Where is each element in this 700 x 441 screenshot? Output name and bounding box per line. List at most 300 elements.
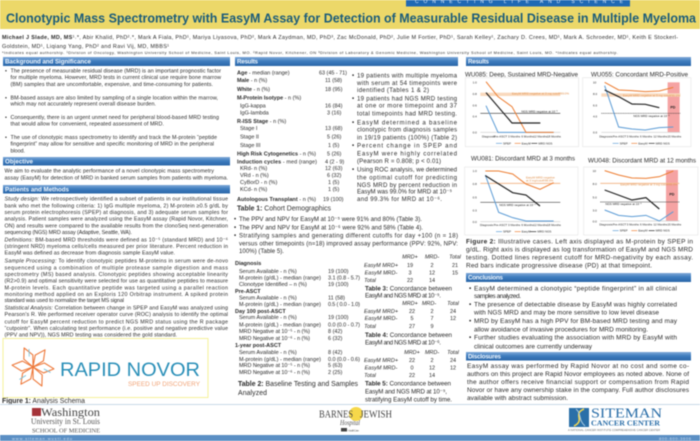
chart: WU055: 0.0 bbox=[593, 131, 597, 135]
text block: methods: monitoring method applied on an Exploris 120 Orbitrap instrument. A spiked protein bbox=[4, 292, 228, 298]
text block: methods: M-protein levels. Each quantitative peptide was targeted using a parallel reaction bbox=[4, 285, 228, 291]
table 2: baseline testing and samples: Day 100 post-ASCT bbox=[235, 309, 286, 315]
heading: disclosures: Disclosures bbox=[468, 353, 502, 360]
chart: WU085: Diagnosis bbox=[482, 134, 496, 138]
table 4: concordance at 10-6: 7 bbox=[430, 316, 434, 322]
chart: WU081: 12 Months bbox=[533, 223, 548, 227]
chart: WU048: EasyM MRD negative at 3 mg cutoff/99.0% bbox=[620, 183, 678, 187]
panel: background and significance bbox=[3, 57, 230, 154]
table 2: baseline testing and samples: MRD Negative at 10⁻⁵ - n (%) bbox=[239, 362, 310, 369]
table 2: baseline testing and samples: 0.0 (0.0 - 0.6) bbox=[328, 357, 360, 363]
authors and affiliations: *Indicates equal authorship. ¹Division of Oncology, Washington University School of Medicine, Saint Louis, MO. ²Rapid Novor, Kitchener, ON ³Division of Laboratory & Genomic Medicine, Washington University School of Medicine, Saint Louis, MO. *Indicates equal authorship. bbox=[2, 50, 618, 55]
logo: Siteman Cancer Center: CANCER CENTER bbox=[591, 418, 661, 428]
chart titles second row bbox=[471, 156, 697, 164]
text block: results bullets: clonotypic from diagnosis samples bbox=[357, 127, 457, 134]
panel: disclosures bbox=[466, 352, 691, 402]
chart: WU081: SPEP bbox=[503, 230, 511, 234]
text block: conclusions bullets: The presence of detectable disease by EasyM was highly correlated bbox=[474, 301, 677, 308]
table 2: baseline testing and samples: 3.1 (0.8 - 5.7) bbox=[328, 276, 360, 282]
text block: results bullets: 19 patients with multiple myeloma bbox=[357, 73, 458, 80]
chart: WU048: 5.0 bbox=[593, 195, 597, 199]
table 2: baseline testing and samples: Serum Available - n (%) bbox=[239, 269, 297, 275]
table 4: concordance at 10-6 bbox=[364, 301, 460, 330]
chart: WU055: SPEP bbox=[620, 141, 628, 145]
table 2 caption: Table 2: Baseline Testing and Samples bbox=[238, 381, 359, 388]
text block: methods: Statistical Analysis: Correlation between change in SPEP and EasyM was analyzed using bbox=[4, 305, 228, 311]
table 3: concordance at 10-5: 21 bbox=[452, 263, 458, 269]
text block: methods: cutoff for EasyM percent reduction to predict NGS MRD status using the R package bbox=[4, 319, 228, 325]
table 1: cohort demographics: IgG-kappa bbox=[240, 104, 267, 110]
figure 2 caption: Figure 2: Illustrative cases. Left axis displayed as M-protein by SPEP in bbox=[466, 239, 693, 246]
table 5: concordance stratified by time: Total bbox=[447, 350, 460, 356]
logo: Washington University School of Medicine: SCHOOL OF MEDICINE bbox=[32, 428, 101, 434]
table 2: baseline testing and samples: MRD Negative at 10⁻⁶ - n (%) bbox=[239, 335, 310, 342]
logo: Barnes-Jewish Hospital: Hospital bbox=[339, 419, 360, 427]
text block: results bullets: with serum at 54 timepoints were bbox=[356, 80, 458, 87]
table 3: concordance at 10-5: MRD+ bbox=[402, 254, 419, 260]
chart: WU085: 18 Months bbox=[547, 134, 561, 138]
table 3: concordance at 10-5: 22 bbox=[407, 278, 413, 284]
chart: WU085: EasyM MRD negative at 3 mg cutoff/99.0% bbox=[512, 91, 569, 95]
figure 2 caption bbox=[466, 239, 693, 270]
table 1: cohort demographics: 13 (68) bbox=[325, 126, 343, 132]
text block: results bullets: at one or more timepoint and 37 bbox=[357, 103, 458, 110]
text block: conclusions bullets: allow avoidance of invasive procedures for MRD monitoring. bbox=[474, 326, 648, 333]
chart: WU048: 15 Months bbox=[667, 222, 682, 226]
text block: methods bbox=[4, 197, 228, 339]
chart: WU081: 1.0 bbox=[473, 169, 477, 173]
text block: results bullets: total timepoints had MRD testing. bbox=[357, 111, 457, 118]
table 1: cohort demographics: 5 (26) bbox=[327, 152, 342, 158]
text block: results bullets: in 19/19 patients (100%) (Table 2) bbox=[357, 134, 457, 141]
chart: WU055: 6 Months bbox=[640, 134, 653, 138]
chart: WU081: 0.0 bbox=[473, 220, 477, 224]
chart: WU085: 0.8 bbox=[473, 92, 477, 96]
chart: WU055: MRD NGS bbox=[656, 141, 670, 145]
text block: methods: sequenced using a combination of multiple protease sample digestion and mass bbox=[4, 265, 228, 271]
text block: results bullets: • bbox=[352, 73, 354, 80]
text block: methods: sequencing (NGS) MRD assay (Adaptive, Seattle, WA). bbox=[4, 230, 132, 236]
chart: WU081 bbox=[465, 167, 578, 235]
table 2: baseline testing and samples: 19 (100) bbox=[328, 282, 349, 288]
table 1: cohort demographics: 5 (26) bbox=[327, 134, 342, 140]
text block: results bullets: • bbox=[352, 119, 354, 126]
table 1: cohort demographics: 4 (2 - 9) bbox=[325, 160, 344, 166]
table 3: concordance at 10-5: 3 bbox=[408, 270, 412, 276]
text block: methods: “cutpointr”. When calculating test performance (i.e. positive and negative predictive value bbox=[4, 326, 228, 332]
text block: results bullets bbox=[352, 73, 458, 203]
table 5: concordance stratified by time: MRD- bbox=[425, 350, 439, 356]
chart titles top row bbox=[465, 72, 688, 78]
text block: methods: ON) and results were compared to the available results from the clonoSeq next-generation bbox=[4, 223, 228, 229]
icon: Rapid Novor star bbox=[12, 346, 54, 388]
chart: WU048: 3 Months bbox=[627, 222, 639, 226]
chart: WU048: 3.0 bbox=[593, 209, 597, 213]
table 1: cohort demographics: M-Protein Isotype - n (%) bbox=[237, 96, 301, 102]
text block: PPV and NPV bullets: • bbox=[234, 233, 236, 240]
table 2: baseline testing and samples: Clonotype Identified – n (%) bbox=[239, 282, 307, 288]
table 2: baseline testing and samples: 2 (25) bbox=[328, 370, 343, 376]
chart: WU055: 10 bbox=[593, 81, 597, 85]
figure 1: Rapid Novor logo: RAPID NOVOR bbox=[60, 360, 200, 381]
table 3 caption bbox=[365, 285, 453, 300]
figure 2 caption: g/dL. Right axis is displayed as log transformation of EasyM and NGS MRD bbox=[466, 246, 693, 253]
chart titles top row: WU085: Deep, Sustained MRD-Negative bbox=[465, 72, 578, 78]
chart: WU081: at 3 mg/cutoff/99.0% bbox=[526, 179, 554, 183]
text block: conclusions bullets bbox=[469, 285, 678, 351]
text block: methods: Definitions: BM-based MRD thresholds were defined as 10⁻⁵ (standard MRD) and 10⁻⁶ bbox=[4, 237, 228, 243]
table 2: baseline testing and samples: 5 (63) bbox=[328, 363, 343, 369]
chart: WU048 bbox=[584, 167, 698, 235]
text block: background bullets: • bbox=[5, 68, 7, 74]
chart: WU055: 4.0 bbox=[593, 115, 597, 119]
text block: background bullets: which may not accurately represent overall disease burden. bbox=[10, 102, 156, 108]
panel: patients and methods bbox=[3, 185, 230, 339]
table 1: cohort demographics: KRd- n (%) bbox=[240, 166, 267, 172]
chart: WU085: 0.0 bbox=[473, 131, 477, 135]
logo: Washington University School of Medicine bbox=[31, 405, 101, 434]
table 2: baseline testing and samples: Serum Available - n (%) bbox=[239, 350, 297, 356]
table 5: concordance stratified by time: 0 bbox=[410, 366, 414, 372]
text block: PPV and NPV bullets: 100%) (Table 5). bbox=[239, 248, 284, 255]
table 1: cohort demographics: Autologous Transplant - n (%) bbox=[237, 197, 316, 203]
chart: WU085: 0.4 bbox=[473, 115, 477, 119]
table 4: concordance at 10-6: 5 bbox=[410, 316, 414, 322]
logo: Barnes-Jewish Hospital: BARNES bbox=[319, 410, 353, 420]
table 3: concordance at 10-5: 19 bbox=[407, 263, 413, 269]
table 3: concordance at 10-5: 15 bbox=[452, 270, 458, 276]
authors and affiliations: Michael J Slade, MD, MS¹˒*, Abir Khalid, PhD²˒*, Mark A Fiala, PhD¹, Mariya Liyasova, PhD², Mark A Zaydman, MD, PhD³, Zac McDonald, PhD², Julie M Fortier, PhD¹, Sarah Kelley¹, Zachary D. Crees, MD¹, Mark A. Schroeder, MD¹, Keith E Stockerl- bbox=[2, 35, 678, 41]
panel: conclusions bbox=[466, 273, 691, 351]
table 1: cohort demographics: 11 (58) bbox=[325, 78, 342, 84]
table 3: concordance at 10-5: MRD- bbox=[425, 254, 439, 260]
text block: conclusions bullets: MRD by EasyM has a high PPV for BM-based MRD testing and may bbox=[474, 318, 678, 325]
chart: WU048: Diagnosis bbox=[599, 222, 613, 226]
table 2: baseline testing and samples: Pre-ASCT bbox=[235, 289, 261, 295]
text block: disclosures: available with abstract submission. bbox=[467, 395, 568, 402]
table 4: concordance at 10-6: Total bbox=[447, 301, 460, 307]
table 5: concordance stratified by time: 24 bbox=[450, 358, 456, 364]
text block: background bullets: BM-based assays are also limited by sampling of a single location within the marrow, bbox=[10, 95, 218, 101]
text block: conclusions bullets: • bbox=[469, 318, 472, 325]
text block: results bullets: Percent change in SPEP and bbox=[357, 143, 457, 150]
text block: methods: spectrometry (MS) based analysis. Clonotypic peptides showing acceptable linearity bbox=[4, 272, 228, 278]
table 1: cohort demographics: 1 (5) bbox=[328, 187, 339, 193]
chart: WU085: 6 Months bbox=[521, 134, 534, 138]
text block: PPV and NPV bullets: Stratifying samples and generating different cutoffs for day +100 (n = 18) bbox=[239, 233, 458, 240]
text block: background bullets: • bbox=[5, 115, 7, 121]
chart: WU081: Pre-ASCT bbox=[494, 223, 507, 227]
heading: patients and methods: Patients and Methods bbox=[5, 186, 70, 193]
table 2: baseline testing and samples: 6 (32) bbox=[328, 336, 343, 342]
text block: conclusions bullets: Further studies evaluating the association with MRD by EasyM with bbox=[474, 335, 677, 342]
chart: WU055: Diagnosis bbox=[599, 134, 613, 138]
table 1: cohort demographics: 63 (45 - 71) bbox=[319, 70, 347, 76]
table 4: concordance at 10-6: MRD- bbox=[422, 301, 436, 307]
text block: PPV and NPV bullets: • bbox=[234, 216, 236, 223]
text block: results bullets: identified (Tables 1 & 2) bbox=[357, 87, 429, 94]
table 2: baseline testing and samples: 11 (58) bbox=[328, 296, 345, 302]
chart: WU081: 0.8 bbox=[473, 182, 477, 186]
panel: results column bbox=[234, 57, 462, 403]
table 1: cohort demographics: Induction cycles - med (range) bbox=[237, 160, 317, 166]
chart titles second row: WU048: Discordant MRD at 12 months bbox=[588, 158, 697, 164]
text block: background bullets: (BM) samples that are uncomfortable, expensive, and time-consuming for patients. bbox=[10, 82, 213, 88]
table 4: concordance at 10-6: 22 bbox=[409, 309, 415, 315]
heading: background and significance bbox=[3, 57, 230, 66]
heading: results bbox=[466, 57, 691, 66]
chart: WU055: 15 Months bbox=[667, 134, 682, 138]
text block: conclusions bullets: • bbox=[469, 285, 472, 292]
chart: WU055: 6.0 bbox=[593, 103, 597, 107]
logo: Siteman Cancer Center: A NATIONAL CANCER INSTITUTE COMPREHENSIVE CANCER CENTER bbox=[568, 428, 660, 432]
chart titles second row: WU081: Discordant MRD at 3 months bbox=[471, 156, 576, 162]
figure 1 caption: Figure 1: Analysis Schema bbox=[2, 398, 85, 405]
table 2: baseline testing and samples: 8 (42) bbox=[328, 350, 343, 356]
chart: WU048: SPEP bbox=[620, 229, 628, 233]
text block: disclosures: Novor or have any ownership stake in the company. Full author disclosures bbox=[467, 387, 690, 394]
figure 1: Rapid Novor logo bbox=[3, 338, 208, 398]
text block: objective: assay (EasyM) for detection of MRD in banked serum samples from patients with myeloma. bbox=[4, 175, 228, 181]
chart: WU081: 18 Months bbox=[547, 223, 561, 227]
table 1: cohort demographics: Stage II bbox=[240, 134, 259, 140]
text block: results bullets: • bbox=[352, 166, 354, 173]
text block: PPV and NPV bullets: The PPV and NPV for EasyM at 10⁻⁵ were 91% and 80% (Table 3). bbox=[239, 216, 422, 223]
text block: background bullets: Consequently, there is an urgent unmet need for peripheral blood-based MRD testing bbox=[10, 115, 219, 121]
table 1: cohort demographics: Male - n (%) bbox=[237, 78, 267, 84]
title banner: Clonotypic Mass Spectrometry with EasyM Assay for Detection of Measurable Residual Disease in Multiple Myeloma bbox=[6, 10, 697, 26]
logo: Barnes-Jewish Hospital: JEWISH bbox=[360, 410, 392, 420]
table 2: baseline testing and samples: M-protein (g/dL) - median (range) bbox=[239, 302, 321, 308]
chart: WU048: MRD NGS bbox=[656, 229, 670, 233]
chart: WU081: NGS MRD negative at 10⁻⁵ bbox=[499, 203, 537, 207]
figure 2 caption: testing. Dotted lines represent cutoff for MRD-negativity by each assay. bbox=[466, 254, 693, 261]
table 1: cohort demographics: R-ISS Stage - n (%) bbox=[237, 119, 286, 125]
authors and affiliations: Goldstein, MD¹, Liqiang Yang, PhD² and Ravi Vij, MD, MBBS¹ bbox=[2, 44, 169, 50]
text block: background bullets bbox=[5, 68, 221, 154]
chart: WU085: EasyM bbox=[522, 141, 531, 145]
table 3: concordance at 10-5: Total bbox=[364, 278, 377, 284]
text block: results bullets: EasyM was 99.0% for MRD at 10⁻⁵ bbox=[357, 189, 452, 196]
table 2: baseline testing and samples: M-protein (g/dL) - median (range) bbox=[239, 357, 321, 363]
chart: WU085: NGS MRD negative at 10⁻⁵ bbox=[521, 109, 559, 113]
table 1: cohort demographics: White - n (%) bbox=[237, 87, 270, 93]
table 4 caption: Table 4: Concordance between bbox=[365, 332, 453, 339]
heading: results: Results bbox=[468, 59, 490, 66]
table 4: concordance at 10-6: 27 bbox=[409, 324, 415, 330]
table 1: cohort demographics: 18 (95) bbox=[325, 87, 343, 93]
table 2 caption: Analyzed bbox=[238, 390, 267, 397]
text block: PPV and NPV bullets bbox=[234, 216, 458, 255]
table 2: baseline testing and samples: M-protein (g/dL) - median (range) bbox=[239, 322, 321, 328]
table 2 caption bbox=[238, 381, 359, 397]
chart: WU085: Pre-ASCT bbox=[494, 134, 507, 138]
chart: WU055: PD bbox=[670, 105, 676, 109]
chart: WU085: MRD NGS bbox=[538, 141, 552, 145]
chart: WU085: 3 Months bbox=[508, 134, 521, 138]
text block: results bullets: EasyM were highly correlated bbox=[357, 150, 457, 157]
table 5: concordance stratified by time: MRD+ bbox=[404, 350, 421, 356]
chart: WU048: 12 Months bbox=[653, 222, 668, 226]
heading: results bbox=[235, 57, 458, 66]
table 3: concordance at 10-5: 14 bbox=[429, 278, 435, 284]
chart: WU081: 0.5 bbox=[473, 195, 477, 199]
table 5 caption: Table 5: Concordance between bbox=[365, 381, 452, 388]
text block: results bullets: 19 patients had NGS MRD testing bbox=[357, 95, 457, 102]
text block: background bullets: that would allow for convenient, repeated assessment of MRD. bbox=[10, 122, 164, 128]
figure 1: Rapid Novor logo: SPEED UP DISCOVERY bbox=[128, 382, 200, 388]
panel: objective bbox=[3, 157, 230, 181]
text block: results bullets: NGS MRD by percent reduction in bbox=[357, 182, 457, 189]
heading: objective: Objective bbox=[5, 158, 34, 165]
text block: disclosures: the author offers receive financial support or compensation from Rapid bbox=[467, 379, 689, 386]
footer bar bbox=[0, 435, 700, 441]
figure 2 caption: Red bars indicate progressive disease (PD) at that timepoint. bbox=[466, 263, 652, 270]
footer bar: 800-600-3606 bbox=[659, 436, 692, 441]
chart: WU081: Diagnosis bbox=[480, 223, 494, 227]
table 3 caption: EasyM and NGS MRD at 10⁻⁵. bbox=[365, 293, 441, 300]
text block: conclusions bullets: • bbox=[469, 335, 472, 342]
table 1: cohort demographics: 12 (63) bbox=[325, 166, 343, 172]
table 1 caption: Table 1: Cohort Demographics bbox=[237, 206, 332, 212]
chart: WU048: 10 bbox=[593, 169, 596, 173]
table 5: concordance stratified by time: EasyM MRD- bbox=[365, 366, 398, 372]
table 1: cohort demographics: Stage I bbox=[240, 126, 258, 132]
table 2: baseline testing and samples: 0.5 ( 0.0 - 1.0) bbox=[328, 302, 360, 308]
table 2: baseline testing and samples: Serum Available - n (%) bbox=[239, 315, 297, 321]
table 4: concordance at 10-6: Total bbox=[364, 324, 377, 330]
table 4 caption bbox=[365, 332, 453, 347]
table 1: cohort demographics: 19 (100) bbox=[323, 197, 344, 203]
table 3: concordance at 10-5: 12 bbox=[429, 270, 435, 276]
footer bar: www.siteman.wustl.edu bbox=[12, 436, 72, 441]
table 5 caption: EasyM and NGS MRD at 10⁻⁵, bbox=[365, 389, 447, 396]
text block: methods: bank who met the following criteria: 1) IgG multiple myeloma, 2) M-protein ≥0.5 g/dL by bbox=[4, 203, 228, 209]
table 5: concordance stratified by time: EasyM MRD+ bbox=[364, 358, 399, 364]
text block: methods: (PPV and NPV)), NGS MRD testing was considered the gold standard. bbox=[4, 333, 177, 339]
chart: WU085: 12 Months bbox=[533, 134, 548, 138]
table 5: concordance stratified by time: 12 bbox=[450, 366, 456, 372]
table 1: cohort demographics: Stage III bbox=[240, 143, 261, 149]
text block: methods: analysis. Patient samples were analyzed using the EasyM assay (Rapid Novor, Kitchner, bbox=[4, 217, 228, 223]
heading: conclusions: Conclusions bbox=[468, 275, 504, 282]
text block: conclusions bullets: EasyM determined a clonotypic “peptide fingerprint” in all clinical bbox=[474, 285, 678, 292]
table 4: concordance at 10-6: 12 bbox=[450, 316, 456, 322]
table 2: baseline testing and samples: 1-year post-ASCT bbox=[235, 343, 282, 349]
chart: WU055: NGS MRD negative at 10⁻⁵ bbox=[633, 114, 671, 118]
heading: patients and methods bbox=[3, 185, 230, 194]
text block: background bullets: The presence of measurable residual disease (MRD) is an important prognostic factor bbox=[10, 68, 221, 74]
table 3: concordance at 10-5 bbox=[364, 254, 462, 284]
table 4: concordance at 10-6: 9 bbox=[430, 324, 434, 330]
table 2: baseline testing and samples: 0.0 (0.0 - 0.7) bbox=[328, 322, 360, 328]
heading: disclosures bbox=[466, 352, 691, 360]
table 1: cohort demographics: KCd- n (%) bbox=[240, 187, 267, 193]
table 5: concordance stratified by time: 14 bbox=[429, 373, 435, 379]
table 5: concordance stratified by time: 12 bbox=[429, 366, 435, 372]
table 4: concordance at 10-6: EasyM MRD- bbox=[365, 316, 398, 322]
text block: disclosures: authors on this project are Rapid Novor employees as noted above. None of bbox=[467, 371, 689, 378]
table 4: concordance at 10-6: 24 bbox=[450, 309, 456, 315]
table 3: concordance at 10-5: EasyM MRD+ bbox=[364, 263, 399, 269]
text block: results bullets: • bbox=[352, 143, 354, 150]
table 1: cohort demographics: 16 (84) bbox=[325, 104, 343, 110]
table 2: baseline testing and samples: M-protein (g/dL) - median (range) bbox=[239, 276, 321, 282]
text block: results bullets: and 99.3% for MRD at 10⁻⁶. bbox=[357, 196, 442, 203]
text block: conclusions bullets: clinical outcomes are currently underway bbox=[474, 344, 593, 351]
chart: WU055: 3 Months bbox=[627, 134, 639, 138]
text block: conclusions bullets: samples analyzed. bbox=[474, 293, 521, 300]
chart: WU081: EasyM bbox=[522, 230, 531, 234]
chart: WU048: EasyM bbox=[638, 229, 648, 233]
table 2: baseline testing and samples: 19 (100) bbox=[328, 315, 349, 321]
table 2: baseline testing and samples: Serum Available - n (%) bbox=[239, 296, 297, 302]
table 2: baseline testing and samples: 8 (42) bbox=[328, 329, 343, 335]
text block: methods: EasyM was defined as decrease from diagnosis sample EasyM value. bbox=[4, 251, 175, 257]
title banner bbox=[0, 0, 700, 29]
text block: background bullets: for multiple myeloma. However, MRD tests in current clinical use require bone marrow bbox=[10, 75, 221, 81]
text block: disclosures: EasyM assay was performed by Rapid Novor at no cost and some co- bbox=[467, 363, 689, 370]
text block: background bullets: The use of clonotypic mass spectrometry to identify and track the M-protein “peptide bbox=[10, 135, 217, 141]
table 1: cohort demographics: CyBorD - n (%) bbox=[240, 180, 277, 186]
text block: results bullets: the optimal cutoff for predicting bbox=[357, 174, 457, 181]
text block: results bullets: • bbox=[352, 95, 354, 102]
table 1: cohort demographics: 1 (5) bbox=[328, 143, 339, 149]
text block: methods: serum protein electrophoresis (SPEP) at diagnosis, and 3) adequate serum samples for bbox=[4, 210, 228, 216]
chart: WU055: Pre-ASCT bbox=[613, 134, 626, 138]
table 3: concordance at 10-5: 2 bbox=[430, 263, 434, 269]
table 2: baseline testing and samples: MRD Negative at 10⁻⁵ - n (%) bbox=[239, 328, 310, 335]
text block: conclusions bullets: with NGS MRD and may be more sensitive to low level disease bbox=[473, 310, 659, 317]
heading: conclusions bbox=[466, 273, 691, 282]
text block: conclusions bullets: • bbox=[469, 301, 472, 308]
text block: background bullets: blood. bbox=[10, 148, 25, 154]
text block: PPV and NPV bullets: versus other timepoints (n=18) improved assay performance (PPV: 92%, NPV: bbox=[239, 240, 458, 247]
table 2: baseline testing and samples: MRD Negative at 10⁻⁶ - n (%) bbox=[239, 369, 310, 376]
table 5: concordance stratified by time bbox=[364, 350, 460, 379]
chart: WU081: EasyM MRD negative bbox=[526, 175, 555, 179]
chart: WU081: 3 Months bbox=[508, 223, 521, 227]
text block: methods: (R2>0.9) and optimal sensitivity were selected for use as quantitative peptides to measure bbox=[4, 279, 228, 285]
table 3: concordance at 10-5: Total bbox=[449, 254, 462, 260]
table 1: cohort demographics: 1 (5) bbox=[328, 180, 339, 186]
chart: WU055 bbox=[583, 78, 691, 147]
table 1: cohort demographics: IgG-lambda bbox=[240, 110, 270, 116]
chart: WU048: PD bbox=[669, 193, 675, 197]
text block: background bullets: • bbox=[5, 135, 7, 141]
text block: PPV and NPV bullets: The PPV and NPV for EasyM at 10⁻⁶ were 92% and 58% (Table 4). bbox=[239, 225, 423, 232]
text block: results bullets: EasyM determined a baseline bbox=[357, 119, 458, 126]
chart: WU085: 1.0 bbox=[473, 81, 477, 85]
chart titles top row: WU055: Concordant MRD-Positive bbox=[591, 72, 688, 78]
logo: Siteman Cancer Center: SITEMAN bbox=[591, 406, 662, 422]
chart: WU048: 0.0 bbox=[593, 219, 597, 223]
text block: background bullets: • bbox=[5, 95, 7, 101]
table 2: baseline testing and samples bbox=[235, 261, 360, 376]
footer divider bbox=[0, 404, 700, 406]
text block: results bullets: (Pearson R = 0.808; p < 0.01) bbox=[357, 158, 441, 165]
chart: WU081: MRD NGS bbox=[537, 230, 551, 234]
chart: WU085: 0.6 bbox=[473, 103, 477, 107]
text block: methods: (stringent NRD) myeloma cells/cells measured per prior literature. Percent reduction in bbox=[4, 244, 228, 250]
logo: Washington University School of Medicine: Washington bbox=[41, 405, 100, 419]
chart: WU048: 8.0 bbox=[593, 182, 597, 186]
chart: WU055: EasyM MRD negative at 3 mg cutoff/99.0% bbox=[623, 94, 680, 98]
text block: objective bbox=[4, 168, 228, 181]
text block: objective: We aim to evaluate the analytic performance of a novel clonotypic mass spectrometry bbox=[4, 168, 214, 174]
text block: methods: standard was used to normalize the target MS signal bbox=[4, 298, 124, 304]
table 1: cohort demographics: High Risk Cytogenetics - n (%) bbox=[237, 152, 316, 158]
